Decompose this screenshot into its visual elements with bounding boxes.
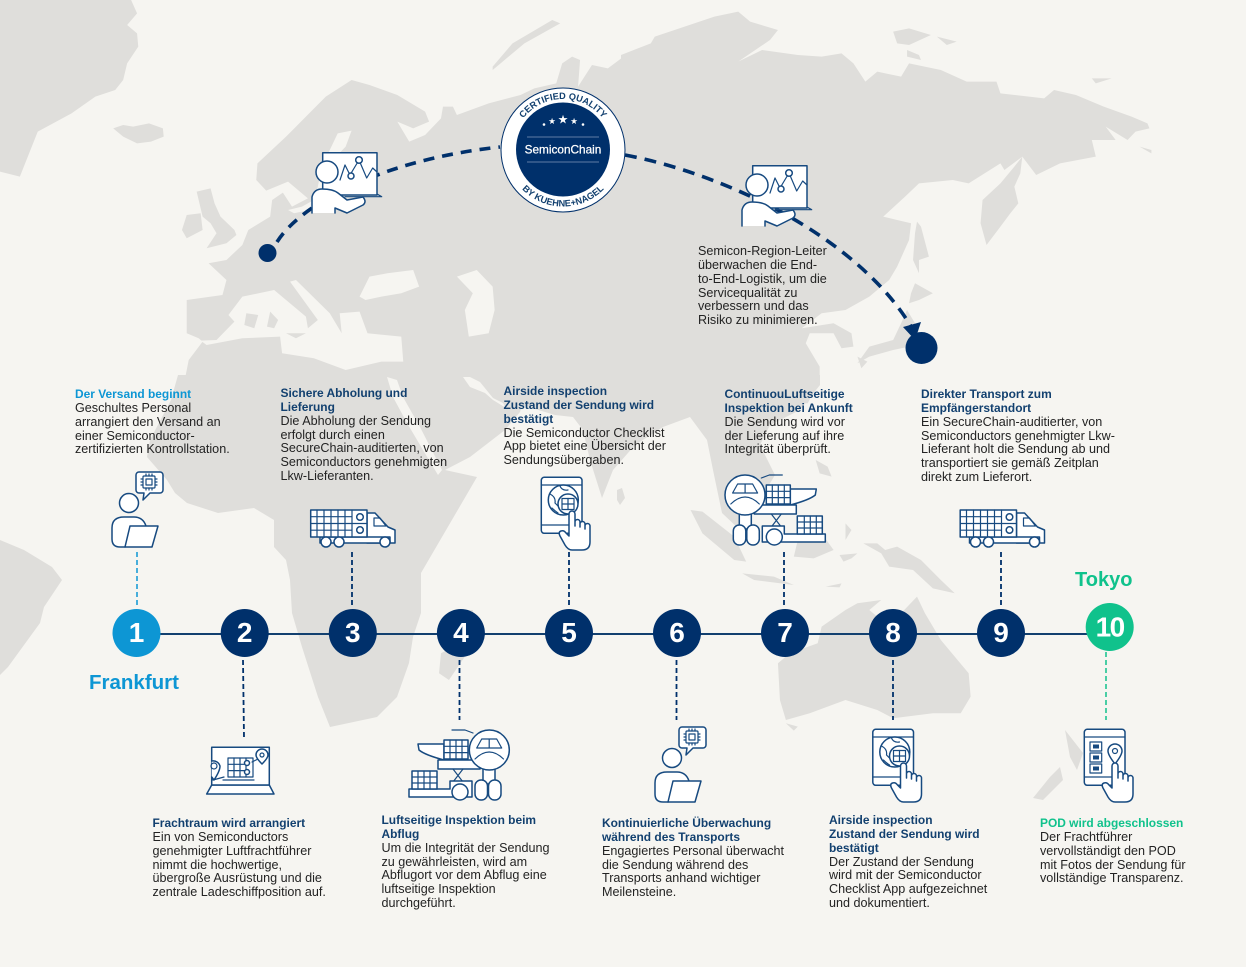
route end dot [906,332,938,364]
body step 1: Geschultes Personal [75,401,191,415]
heading step 3: Lieferung [280,400,335,414]
body step 10: Der Frachtführer [1040,830,1132,844]
body step 4: luftseitige Inspektion [382,882,496,896]
text block step 9 [921,387,1115,484]
heading step 8 [829,813,980,855]
body step 3: erfolgt durch einen [280,428,385,442]
text: regional managers: verbessern und das [698,299,809,313]
body step 8: wird mit der Semiconductor [829,868,982,882]
city label: Tokyo: Tokyo [1075,569,1132,591]
body step 10: vollständige Transparenz. [1040,871,1184,885]
body step 2: zentrale Ladeschiffposition auf. [152,885,326,899]
text block step 3 [280,386,447,483]
badge: SemiconChain certified quality [500,88,626,212]
heading step 6: Kontinuierliche Überwachung [602,816,771,830]
body step 4 [382,841,550,910]
step marker 3 [329,609,377,657]
step marker 6 [653,609,701,657]
icon 5: phone with globe [541,477,590,550]
body step 10: mit Fotos der Sendung für [1040,858,1186,872]
text block step 4 [382,813,550,910]
body step 5: App bietet eine Übersicht der [504,439,666,453]
body step 9: transportiert sie gemäß Zeitplan [921,456,1099,470]
heading step 1: Der Versand beginnt [75,387,191,401]
text: regional managers: Servicequalität zu [698,286,797,300]
body step 8: und dokumentiert. [829,896,930,910]
body step 6: Meilensteine. [602,885,676,899]
heading step 5: Airside inspection [504,384,607,398]
badge: SemiconChain certified quality: ★ [548,117,556,127]
text: regional managers [698,244,827,327]
heading step 7: Inspektion bei Ankunft [724,401,853,415]
body step 7: der Lieferung auf ihre [724,429,844,443]
body step 2 [152,830,326,899]
step marker 7 [761,609,809,657]
connector 10 [1105,652,1107,720]
heading step 4 [382,813,536,841]
heading step 10: POD wird abgeschlossen [1040,816,1183,830]
heading step 5: bestätigt [504,412,553,426]
body step 2: Ein von Semiconductors [152,830,288,844]
connector 9 [1000,552,1002,606]
connector 4 [458,660,460,720]
heading step 8: bestätigt [829,841,879,855]
icon 10: phone with pin and photos [1084,729,1133,802]
icon 1: person with chip [112,472,163,547]
icon 6: person with chip [655,727,706,802]
step marker 9 [977,609,1025,657]
badge: SemiconChain certified quality: SemiconChain [525,142,601,156]
step marker 5: 5 [561,617,577,648]
heading step 5: Zustand der Sendung wird [504,398,654,412]
step marker 7: 7 [777,617,793,648]
body step 1: einer Semiconductor- [75,429,195,443]
text block step 10 [1040,816,1186,885]
text block step 5 [504,384,666,467]
text block step 6 [602,816,784,899]
badge: SemiconChain certified quality: ★ [570,117,578,127]
connector 8 [892,660,894,720]
step marker 2: 2 [237,617,252,648]
body step 9: direkt zum Lieferort. [921,470,1032,484]
heading step 2: Frachtraum wird arrangiert [152,816,305,830]
text block step 7 [724,387,853,456]
icon 8: phone with globe [873,729,922,802]
text: regional managers: to-End-Logistik, um die [698,272,827,286]
heading step 4: Abflug [382,827,419,841]
icon 4: aircraft loader [409,730,509,800]
heading step 6 [602,816,771,844]
connector 6 [676,660,678,720]
map: seas [201,131,506,475]
body step 6 [602,844,784,899]
connector 1 [136,552,138,606]
heading step 7 [724,387,853,415]
step marker 5 [545,609,593,657]
timeline line [137,633,1109,635]
heading step 8: Zustand der Sendung wird [829,827,980,841]
heading step 9: Empfängerstandort [921,401,1031,415]
step marker 10 [1086,603,1134,651]
body step 3 [280,414,447,483]
body step 5: Sendungsübergaben. [504,453,624,467]
icon 2: laptop with map [207,747,274,794]
heading step 3: Sichere Abholung und [280,386,407,400]
heading step 5 [504,384,654,426]
badge: SemiconChain certified quality: CERTIFIED QUALITY [520,92,608,117]
body step 2: übergroße Ausrüstung und die [152,871,322,885]
body step 9: Semiconductors genehmigter Lkw- [921,429,1115,443]
body step 4: zu gewährleisten, wird am [382,855,527,869]
route arc: certification badge to Tokyo [625,155,912,328]
heading step 8: Airside inspection [829,813,932,827]
badge: SemiconChain certified quality: ★ [558,112,568,126]
step marker 4 [437,609,485,657]
text block step 1 [75,387,230,456]
heading step 6: während des Transports [602,830,740,844]
step marker 1 [112,609,160,657]
step marker 8 [869,609,917,657]
route arrowhead [903,322,921,340]
icon 7: aircraft loader mirrored [725,475,825,545]
step marker 10: 10 [1096,612,1125,642]
step marker 8: 8 [885,617,901,648]
heading step 9: Direkter Transport zum [921,387,1052,401]
heading step 4: Luftseitige Inspektion beim [382,813,536,827]
body step 6: Transports anhand wichtiger [602,871,760,885]
heading step 3 [280,386,407,414]
body step 9 [921,415,1115,484]
text block step 2 [152,816,326,899]
body step 7: Die Sendung wird vor [724,415,845,429]
body step 2: nimmt die hochwertige, [152,858,282,872]
connector 2 [243,660,244,738]
body step 9: Ein SecureChain-auditierter, von [921,415,1102,429]
body step 8: Checklist App aufgezeichnet [829,882,987,896]
body step 7: Integrität überprüft. [724,442,831,456]
city label: Frankfurt: Frankfurt [89,671,179,694]
body step 4: Um die Integrität der Sendung [382,841,550,855]
icon 3: truck [311,510,395,547]
step marker 3: 3 [345,617,361,648]
body step 10 [1040,830,1186,885]
route arc: Frankfurt to certification badge [277,147,500,242]
body step 1 [75,401,230,456]
body step 2: genehmigter Luftfrachtführer [152,844,311,858]
body step 5 [504,426,666,467]
step marker 2 [221,609,269,657]
body step 3: Semiconductors genehmigten [280,455,447,469]
body step 3: Die Abholung der Sendung [280,414,431,428]
heading step 7: ContinuouLuftseitige [724,387,845,401]
body step 9: Lieferant holt die Sendung ab und [921,442,1110,456]
body step 3: Lkw-Lieferanten. [280,469,374,483]
connector 7 [783,552,785,606]
body step 1: arrangiert den Versand an [75,415,221,429]
text block step 8 [829,813,988,910]
text: regional managers: überwachen die End- [698,258,817,272]
body step 8: Der Zustand der Sendung [829,855,974,869]
body step 7 [724,415,845,456]
body step 10: vervollständigt den POD [1040,844,1176,858]
connector 5 [568,552,570,606]
icon: regional manager west [312,153,382,213]
body step 6: Engagiertes Personal überwacht [602,844,784,858]
badge: SemiconChain certified quality: BY KUEHNE+NAGEL [522,184,604,206]
body step 8 [829,855,988,910]
body step 6: die Sendung während des [602,858,748,872]
body step 4: Abflugort vor dem Abflug eine [382,868,547,882]
text: regional managers: Semicon-Region-Leiter [698,244,827,258]
step marker 6: 6 [669,617,685,648]
step marker 9: 9 [993,617,1009,648]
step marker 4: 4 [453,617,469,648]
body step 4: durchgeführt. [382,896,456,910]
icon: regional manager east [742,166,812,226]
body step 1: zertifizierten Kontrollstation. [75,442,230,456]
body step 5: Die Semiconductor Checklist [504,426,664,440]
body step 3: SecureChain-auditierten, von [280,441,444,455]
connector 3 [351,552,353,606]
icon 9: truck [960,510,1044,547]
route start dot [258,244,276,262]
map: land masses [0,0,1151,800]
heading step 9 [921,387,1052,415]
step marker 1: 1 [129,617,144,648]
text: regional managers: Risiko zu minimieren. [698,313,818,327]
